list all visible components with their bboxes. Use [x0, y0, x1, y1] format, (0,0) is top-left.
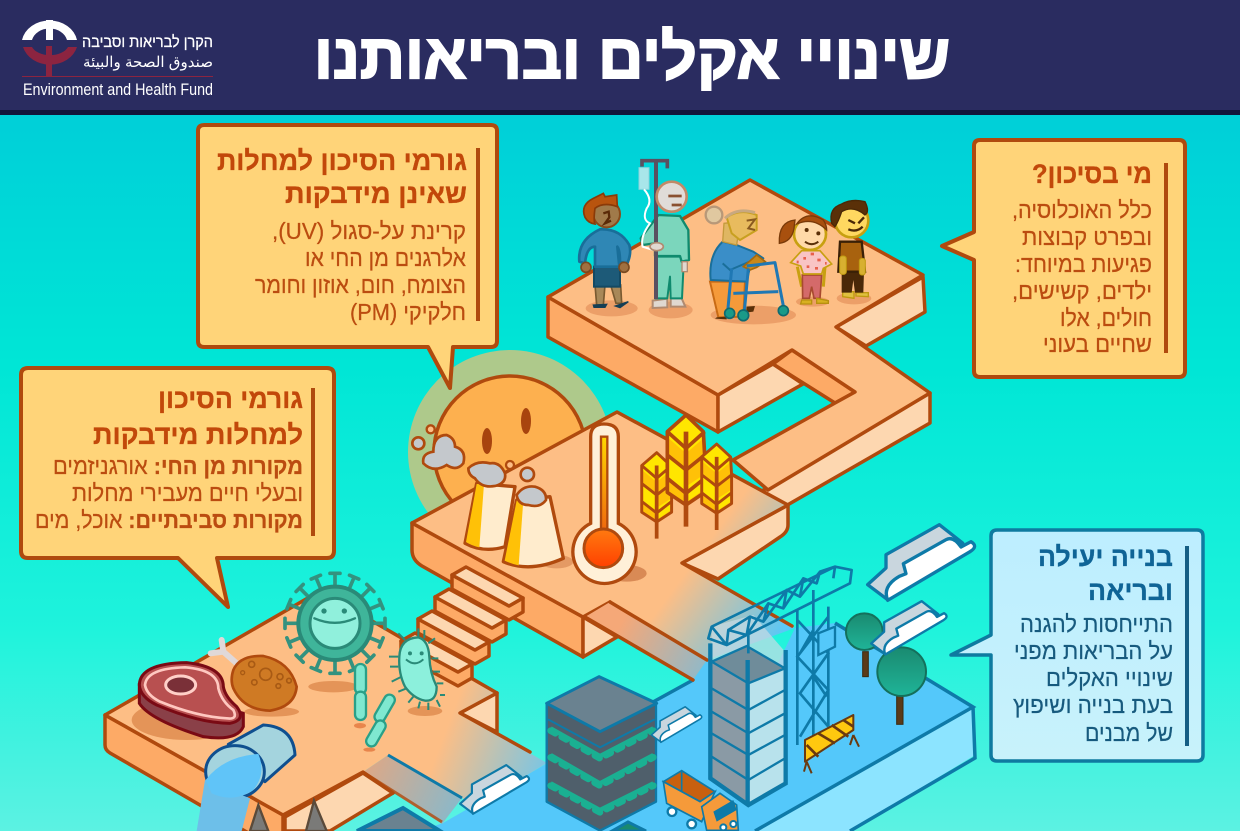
- delivery truck: [663, 771, 738, 830]
- logo english name: Environment and Health Fund: [23, 80, 213, 99]
- logo arabic name: صندوق الصحة والبيئة: [83, 54, 213, 71]
- callout: communicable disease risk factors: למחלות מידבקות: [93, 420, 303, 450]
- tree front: [877, 647, 926, 724]
- cooling tower front: [503, 468, 573, 568]
- callout: efficient and healthy building: על הבריאות מפני: [1014, 638, 1173, 664]
- callout: who is at risk: שחיים בעוני: [1043, 331, 1152, 357]
- crane cab: [818, 627, 835, 655]
- rod bacteria: [354, 664, 397, 752]
- small bottom buildings: [357, 808, 646, 831]
- callout: who is at risk: [942, 140, 1185, 377]
- person: elderly woman with walker: [706, 207, 796, 324]
- body: מקורות מן החי: אורגניזמים: [53, 453, 303, 479]
- callout: who is at risk: חולים, אלו: [1060, 305, 1152, 331]
- callout: non-communicable disease risk factors: אלרגנים מן החי או: [305, 245, 466, 271]
- thermometer: [573, 424, 647, 583]
- upper platform: [548, 180, 930, 515]
- people at risk: [579, 161, 871, 324]
- body: כלל האוכלוסיה,: [1012, 197, 1152, 223]
- crane tower: [797, 590, 828, 745]
- wheat stalks: [642, 415, 732, 539]
- person: girl in floral dress: [779, 216, 832, 307]
- warning barrier: [804, 715, 859, 773]
- callout: who is at risk: פגיעות במיוחד:: [1015, 251, 1152, 277]
- callout: non-communicable disease risk factors: הצומח, חום, אוזון וחומר: [255, 272, 466, 298]
- heading: מי בסיכון?: [1032, 159, 1152, 189]
- callout: efficient and healthy building: בעת בנייה ושיפוץ: [1013, 692, 1173, 718]
- pipe with water: [197, 725, 295, 831]
- callout: communicable disease risk factors: ובעלי חיים מעבירי מחלות: [72, 480, 303, 506]
- heading: גורמי הסיכון למחלות: [217, 146, 467, 176]
- cooling tower rear: [465, 461, 515, 549]
- arm from middle platform to blue floor: [585, 602, 707, 680]
- header bar: [0, 0, 1240, 115]
- heading: בנייה יעילה: [1038, 542, 1173, 572]
- tree back: [846, 613, 883, 677]
- steak: [132, 663, 243, 740]
- title: שינויי אקלים ובריאותנו: [314, 22, 950, 92]
- callout: efficient and healthy building: ובריאה: [1088, 576, 1173, 606]
- body: התייחסות להגנה: [1020, 611, 1173, 637]
- person: patient with IV pole: [639, 161, 693, 318]
- heading: גורמי הסיכון: [158, 384, 303, 414]
- crane jib: [708, 567, 852, 653]
- clouds over site: [460, 525, 975, 814]
- chicken drumstick: [211, 640, 299, 717]
- kidney bacterium: [389, 628, 445, 716]
- logo hebrew name: הקרן לבריאות וסביבה: [82, 33, 213, 51]
- callout: efficient and healthy building: של מבנים: [1085, 720, 1173, 746]
- green stacked building: [547, 677, 657, 831]
- logo emblem: [22, 20, 77, 77]
- body: קרינת על-סגול (UV),: [272, 218, 466, 244]
- callout: efficient and healthy building: [951, 530, 1203, 761]
- support legs: [250, 801, 327, 831]
- callout: communicable disease risk factors: מקורות סביבתיים: אוכל, מים: [35, 507, 303, 533]
- callout: who is at risk: ובפרט קבוצות: [1022, 224, 1152, 250]
- logo: Environment and Health Fund: [22, 20, 213, 99]
- blue construction floor: [420, 623, 975, 831]
- virus: [285, 573, 385, 692]
- sun: [408, 350, 612, 554]
- construction site objects: [547, 567, 926, 831]
- callout: non-communicable disease risk factors: [198, 125, 497, 388]
- callout: non-communicable disease risk factors: חלקיקי (PM): [350, 299, 466, 325]
- tall building under construction: [710, 615, 786, 805]
- callout: efficient and healthy building: שינויי האקלים: [1046, 665, 1173, 691]
- small cloud by building: [651, 707, 702, 742]
- callout: communicable disease risk factors: [21, 368, 334, 607]
- callout: non-communicable disease risk factors: שאינן מידבקות: [285, 179, 467, 209]
- cooling towers and thermometer and wheat: [412, 415, 732, 583]
- lower platform objects: [132, 573, 445, 831]
- middle platform: [412, 412, 795, 660]
- lower left platform: [105, 591, 547, 831]
- smoke cloud: [412, 425, 464, 469]
- person: boy in brown shirt: [831, 200, 871, 304]
- callout: who is at risk: ילדים, קשישים,: [1012, 278, 1152, 304]
- stairs: [401, 567, 523, 686]
- person: boy with empty pockets: [579, 193, 638, 316]
